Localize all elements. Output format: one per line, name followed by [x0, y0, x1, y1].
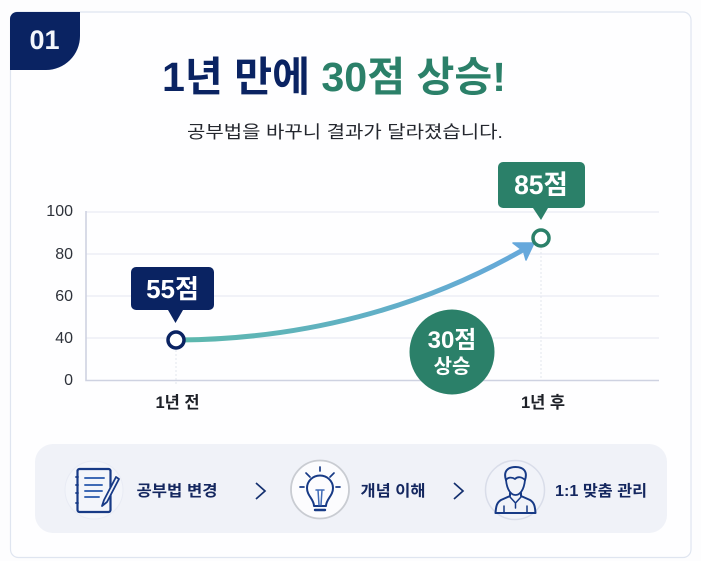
callout: 55 points: 55점	[146, 274, 199, 304]
marker: before	[168, 332, 184, 348]
axes	[86, 211, 659, 380]
x axis labels: 1년 전	[155, 393, 200, 412]
y axis labels: 80	[55, 246, 73, 263]
number badge: 01	[29, 25, 60, 55]
marker: after	[533, 230, 549, 246]
y axis labels	[46, 203, 73, 389]
icon: notepad and pen	[65, 461, 123, 519]
icon: person	[486, 460, 544, 520]
callout: 55 points	[131, 267, 214, 323]
badge: 30 points up	[410, 310, 494, 394]
y axis labels: 40	[55, 330, 73, 347]
title: 1년 만에 30점 상승!	[162, 54, 506, 100]
badge: 30 points up: 30점	[428, 327, 476, 354]
number badge	[10, 12, 80, 70]
label: concept understanding: 개념 이해	[360, 482, 426, 500]
growth curve arrow	[180, 243, 534, 340]
y axis labels: 60	[55, 288, 73, 305]
label: one-on-one management: 1:1 맞춤 관리	[555, 482, 647, 500]
icon: light bulb	[291, 460, 349, 518]
line chart	[46, 162, 659, 412]
subtitle: 공부법을 바꾸니 결과가 달라졌습니다.	[187, 122, 503, 142]
y axis labels: 100	[46, 203, 73, 220]
callout: 85 points: 85점	[514, 170, 568, 200]
arrow: step one to two	[256, 483, 265, 499]
y axis labels: 0	[64, 372, 73, 389]
label: study method change: 공부법 변경	[136, 482, 218, 500]
badge: 30 points up: 상승	[434, 355, 470, 378]
callout: 85 points	[498, 162, 585, 220]
process panel	[35, 444, 667, 533]
x axis labels: 1년 후	[521, 393, 565, 412]
arrow: step two to three	[454, 483, 463, 499]
x axis labels	[155, 393, 565, 412]
